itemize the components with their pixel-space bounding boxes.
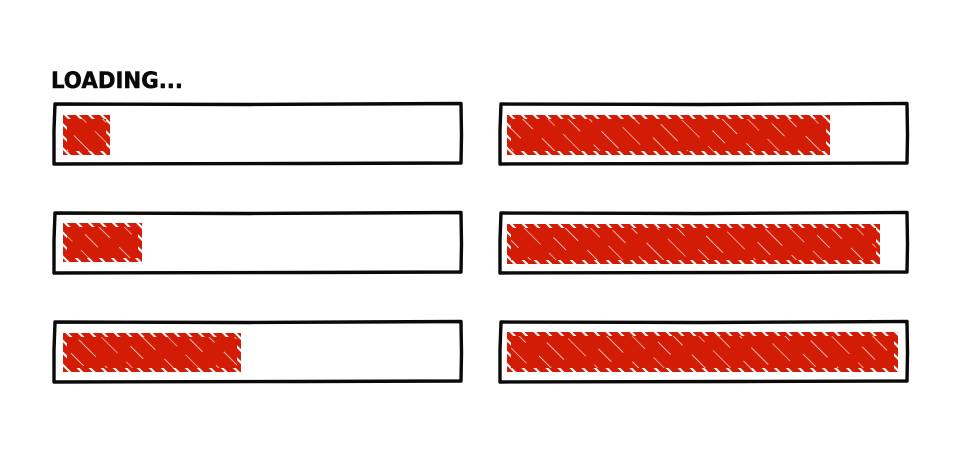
- fill: about 92 percent: [507, 224, 880, 264]
- progress bar: step 6: [500, 322, 908, 382]
- progress bar: step 4: [500, 104, 908, 164]
- progress bar: step 3: [54, 322, 462, 382]
- fill: about 80 percent: [507, 115, 830, 155]
- title: LOADING...: [51, 69, 183, 94]
- progress bar: step 2: [54, 212, 462, 273]
- progress bar: step 1: [54, 104, 462, 164]
- fill: about 96 percent: [507, 332, 898, 372]
- fill: about 45 percent: [63, 333, 241, 372]
- fill: about 10 percent: [63, 115, 110, 155]
- progress bar: step 5: [500, 212, 908, 273]
- fill: about 20 percent: [63, 223, 142, 262]
